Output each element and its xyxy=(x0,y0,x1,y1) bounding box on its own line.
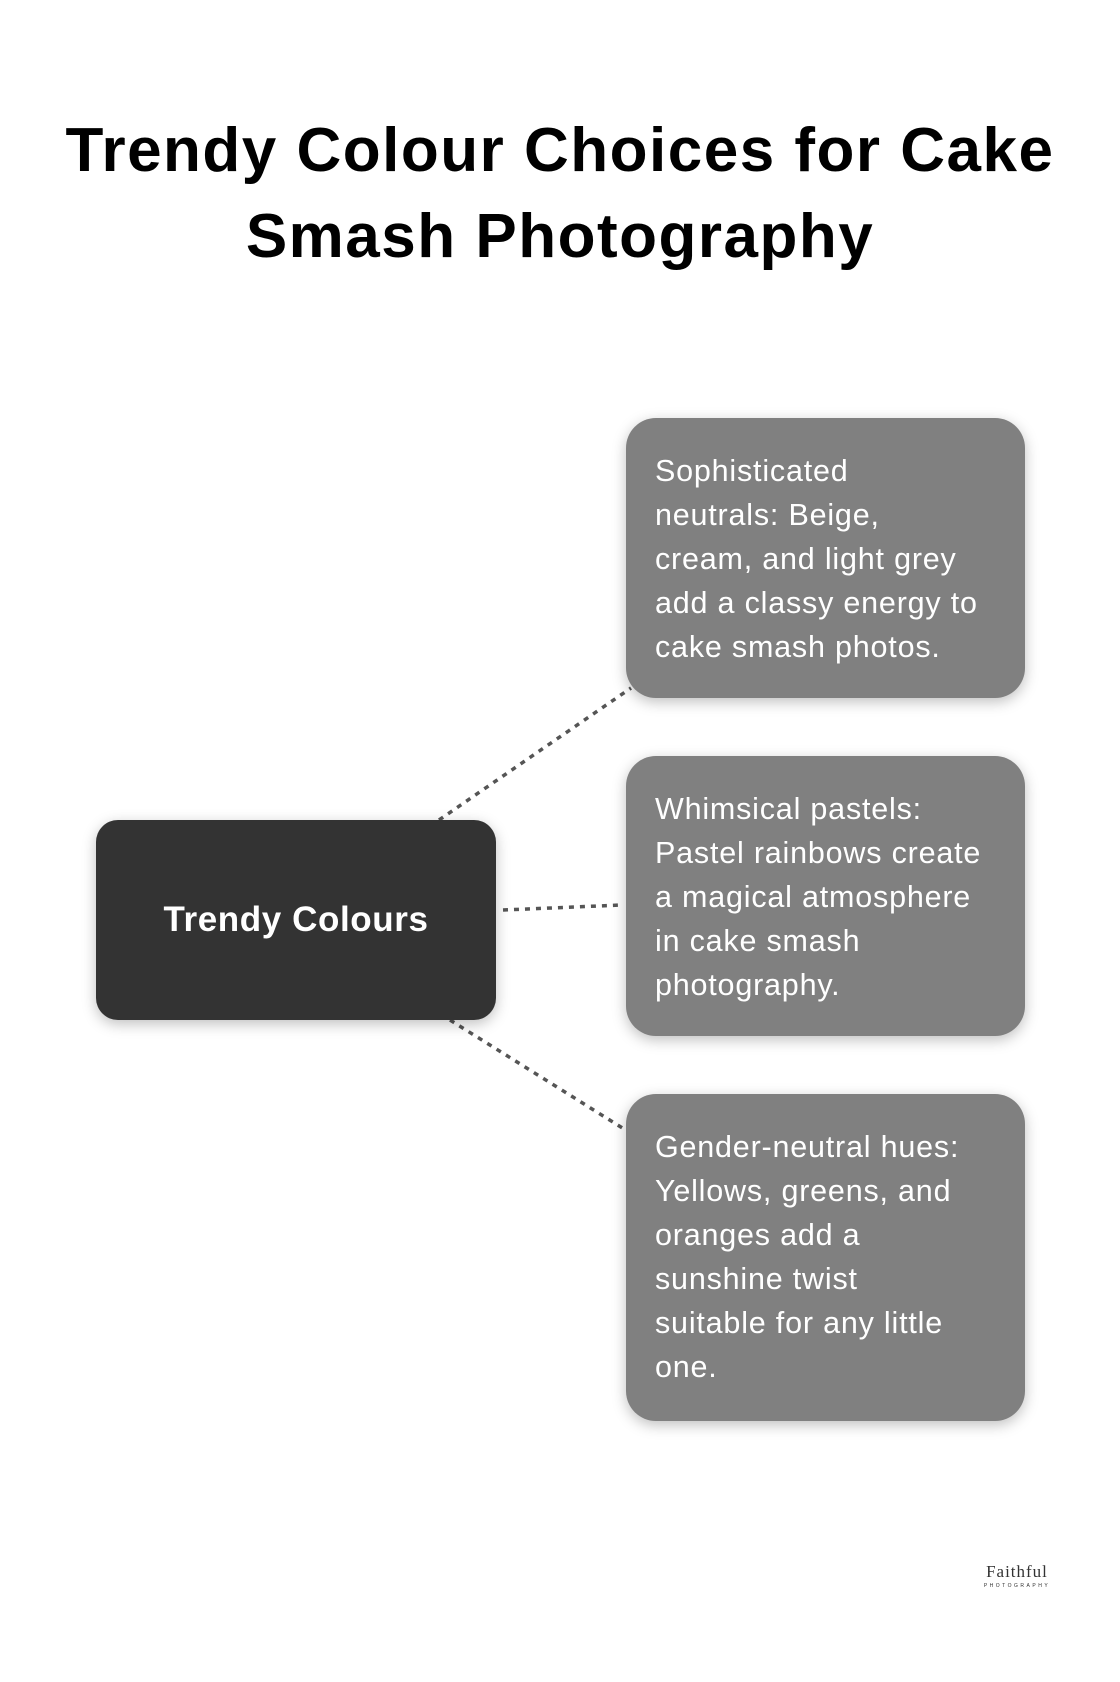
central node xyxy=(96,820,496,1020)
logo: Faithful xyxy=(986,1562,1048,1581)
arrow: top connector xyxy=(439,688,631,820)
panel: pastels: a magical atmosphere xyxy=(655,880,971,914)
title: Smash Photography xyxy=(246,202,874,271)
panel: pastels: Pastel rainbows create xyxy=(655,836,981,870)
panel: gender-neutral: suitable for any little xyxy=(655,1306,943,1340)
logo: PHOTOGRAPHY xyxy=(984,1583,1050,1589)
panel: neutrals: add a classy energy to xyxy=(655,586,978,620)
panel: pastels xyxy=(626,756,1025,1036)
panel: pastels: in cake smash xyxy=(655,924,860,958)
panel: neutrals: cream, and light grey xyxy=(655,542,957,576)
panel: gender-neutral: oranges add a xyxy=(655,1218,860,1252)
logo xyxy=(984,1562,1050,1589)
panel: gender-neutral: Yellows, greens, and xyxy=(655,1174,951,1208)
panel: neutrals: Sophisticated xyxy=(655,454,849,488)
panel: neutrals xyxy=(626,418,1025,698)
title xyxy=(66,116,1054,271)
panel: gender-neutral: one. xyxy=(655,1350,718,1384)
panel: neutrals: cake smash photos. xyxy=(655,630,941,664)
panel: pastels: photography. xyxy=(655,968,840,1002)
panel: gender-neutral: Gender-neutral hues: xyxy=(655,1130,959,1164)
arrow: bottom connector xyxy=(450,1020,624,1129)
panel: gender-neutral: sunshine twist xyxy=(655,1262,858,1296)
panel: pastels: Whimsical pastels: xyxy=(655,792,922,826)
panel: gender-neutral xyxy=(626,1094,1025,1421)
title: Trendy Colour Choices for Cake xyxy=(66,116,1054,185)
panel: neutrals: neutrals: Beige, xyxy=(655,498,880,532)
arrow: middle connector xyxy=(503,905,622,910)
central node: Trendy Colours xyxy=(163,900,429,939)
